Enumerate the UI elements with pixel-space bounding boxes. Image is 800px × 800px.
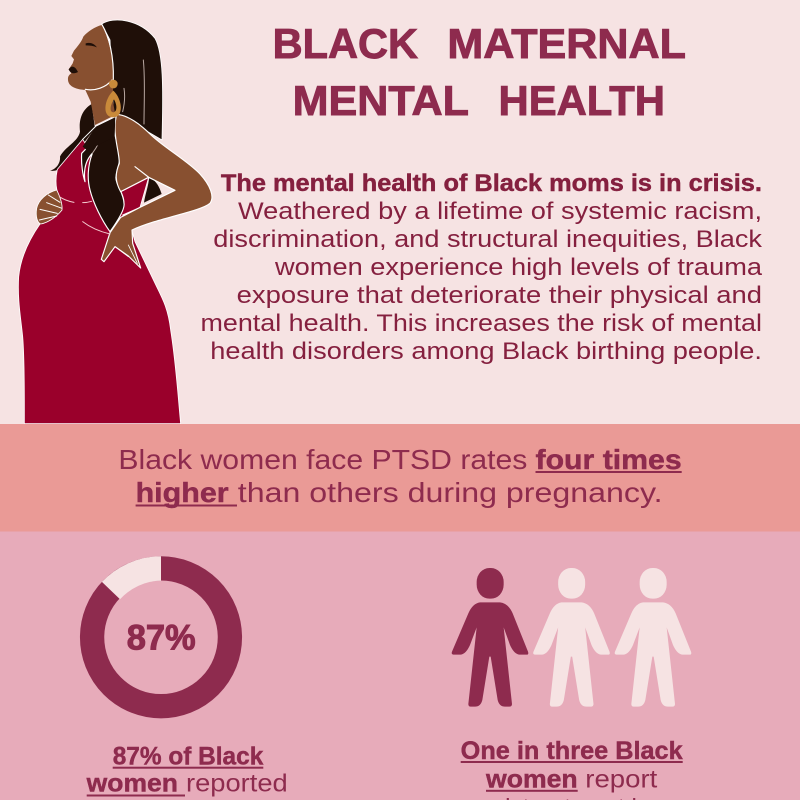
PTSD statement: Black women face PTSD rates [118,444,527,475]
caption: 87% of Black women: women [86,770,178,798]
PTSD statement: four times [536,444,682,475]
title: HEALTH [498,77,665,124]
title: MENTAL [293,77,469,124]
caption: 87% of Black women: reported [186,770,288,798]
caption: 87% of Black women: 87% of Black [113,742,263,770]
title [273,20,686,124]
caption: 87% of Black women [86,742,288,798]
intro paragraph: The mental health of Black moms is in crisis. [221,170,762,197]
panel: PTSD band [0,424,800,532]
person 3 [615,568,691,707]
title: BLACK [273,20,418,67]
person 2 [533,568,610,707]
intro paragraph: discrimination, and structural inequities, Black [213,226,763,253]
intro paragraph: women experience high levels of trauma [274,254,763,281]
intro paragraph: mental health. This increases the risk of mental [200,310,762,337]
PTSD statement: than others during pregnancy. [238,477,663,508]
caption: one in three Black women: report [585,765,657,793]
panel: statistics [0,532,800,800]
caption: one in three Black women: One in three Black [461,737,683,765]
donut chart: 87% [92,556,230,706]
PTSD statement: higher [136,477,229,508]
intro paragraph [200,170,763,365]
donut chart: 87%: 87% [127,618,196,657]
PTSD statement [118,444,682,508]
title: MATERNAL [447,20,686,67]
intro paragraph: Weathered by a lifetime of systemic racism, [238,198,762,225]
person 1 highlighted [452,568,528,707]
illustration: pregnant Black woman in red dress [18,20,212,424]
caption: one in three Black women [461,737,683,800]
icon: three people, one highlighted [452,568,691,707]
intro paragraph: exposure that deteriorate their physical and [237,282,762,309]
intro paragraph: health disorders among Black birthing people. [210,338,762,365]
caption: one in three Black women: women [485,765,578,793]
